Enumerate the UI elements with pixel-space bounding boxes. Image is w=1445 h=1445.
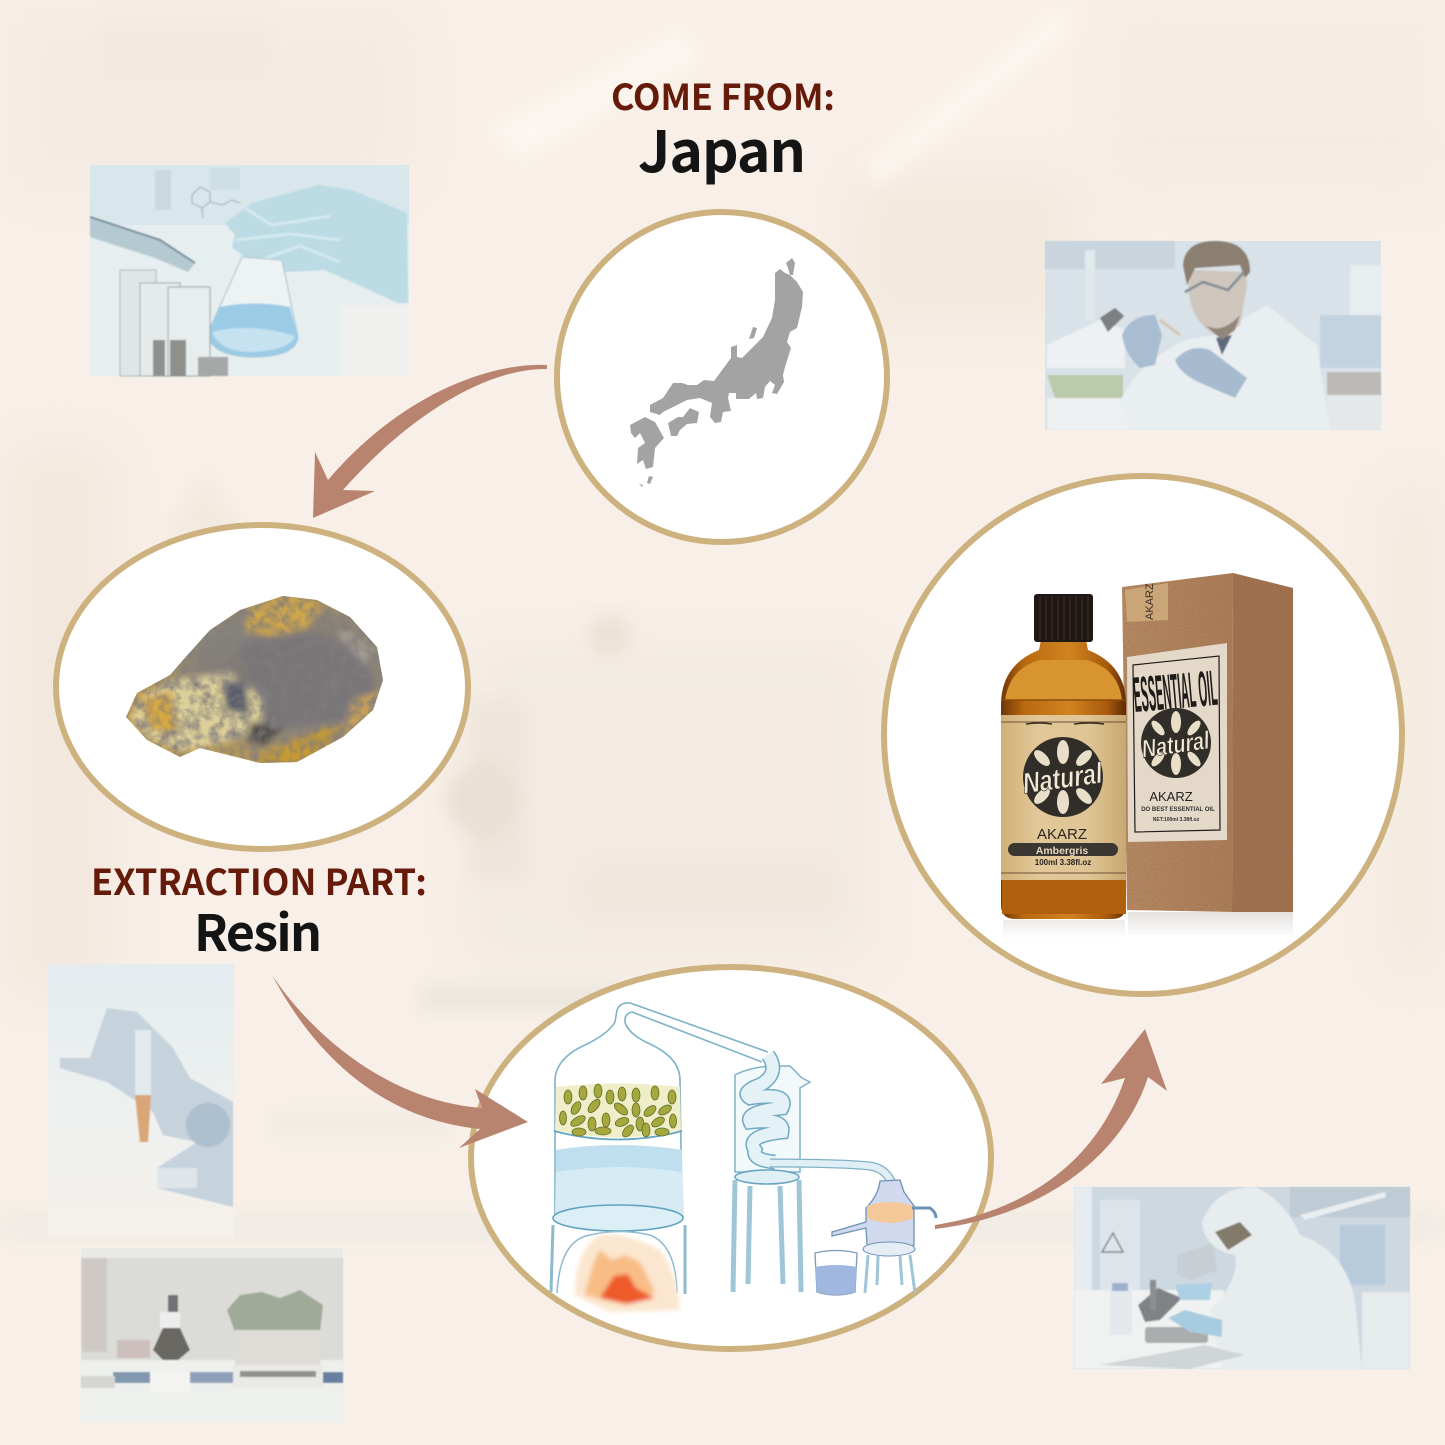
fire [575,1235,680,1312]
circle: finished product [884,476,1402,994]
product box: Natural [1140,726,1212,764]
heading: come from: Japan [638,107,806,189]
amber bottle: Ambergris [1036,845,1088,857]
circle: Japan map [557,212,887,542]
product box: AKARZ [1144,583,1156,620]
ellipse: distillation apparatus [471,967,991,1349]
ellipse: ambergris resin [56,525,468,849]
product box [1120,570,1295,915]
receiver and beaker [815,1180,936,1295]
product box: NET:100ml 3.38fl.oz [1153,817,1200,823]
product box: ESSENTIAL OIL [1131,659,1219,723]
heading: extraction part: EXTRACTION PART: [91,854,427,906]
still pot [551,1003,768,1312]
icon: map of Japan [630,258,803,487]
heading: extraction part [91,854,427,966]
leaves [560,1084,676,1139]
heading: come from: COME FROM: [611,69,835,121]
amber bottle: AKARZ [1037,826,1087,843]
thumbnail: gloved hand with test tube [48,964,234,1239]
arrow: Japan to resin [313,365,547,518]
image: ambergris rock [126,596,383,763]
condenser [733,1055,892,1292]
amber bottle: Natural [1021,758,1105,800]
floor reflection [1003,912,1293,938]
thumbnail: scientist at microscope [1045,241,1381,430]
heading: come from [611,69,835,189]
heading: extraction part: Resin [194,894,322,966]
thumbnail: flask and gloved hand [90,165,409,376]
arrow: resin to distillation [272,975,528,1148]
molecule sketch [192,187,240,218]
thumbnail: lab bench with microscope [81,1248,343,1422]
product box: AKARZ [1149,789,1193,804]
arrow: distillation to product [935,1029,1167,1229]
amber bottle: 100ml 3.38fl.oz [1035,858,1091,867]
amber bottle [1001,594,1126,919]
product box: DO BEST ESSENTIAL OIL [1141,807,1215,813]
thumbnail: researcher in protective suit [1074,1187,1410,1370]
